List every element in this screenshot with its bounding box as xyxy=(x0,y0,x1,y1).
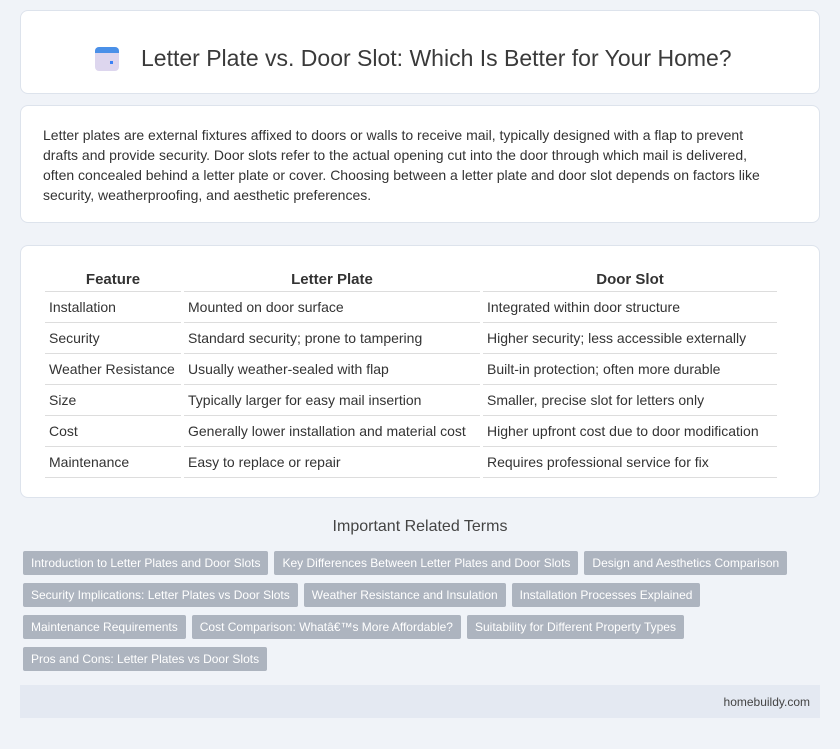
footer xyxy=(20,685,820,718)
tags xyxy=(23,551,787,671)
panel: comparison table: Size xyxy=(49,392,76,408)
panel: comparison table: Built-in protection; often more durable xyxy=(487,361,720,377)
intro text xyxy=(20,105,820,223)
tags: Cost Comparison: Whatâ€™s More Affordable? xyxy=(200,620,453,634)
panel: comparison table: Integrated within door structure xyxy=(487,299,680,315)
panel: comparison table: Installation xyxy=(49,299,116,315)
panel: comparison table: Maintenance xyxy=(49,454,129,470)
panel: comparison table: Feature xyxy=(86,270,140,288)
panel: comparison table: Weather Resistance xyxy=(49,361,175,377)
panel: comparison table: Cost xyxy=(49,423,78,439)
header card xyxy=(20,10,820,94)
panel: comparison table: Generally lower installation and material cost xyxy=(188,423,466,439)
panel: comparison table: Higher security; less accessible externally xyxy=(487,330,746,346)
intro text: Letter plates are external fixtures affixed to doors or walls to receive mail, typically designed with a flap to prevent drafts and provide security. Door slots refer to the actual opening cut into the door through which mail is delivered, often concealed behind a letter plate or cover. Choosing between a letter plate and door slot depends on factors like security, weatherproofing, and aesthetic preferences. xyxy=(43,127,760,203)
tags: Security Implications: Letter Plates vs Door Slots xyxy=(31,588,290,602)
panel: comparison table xyxy=(20,245,820,498)
icon: calendar xyxy=(95,47,119,71)
panel: comparison table: Usually weather-sealed with flap xyxy=(188,361,389,377)
panel: comparison table: Standard security; prone to tampering xyxy=(188,330,422,346)
tags: Design and Aesthetics Comparison xyxy=(592,556,779,570)
panel: comparison table: Mounted on door surface xyxy=(188,299,344,315)
title: Letter Plate vs. Door Slot: Which Is Better for Your Home? xyxy=(141,45,732,71)
tags: Pros and Cons: Letter Plates vs Door Slots xyxy=(31,652,259,666)
panel: comparison table: Letter Plate xyxy=(291,270,373,288)
panel: comparison table: Easy to replace or repair xyxy=(188,454,341,470)
panel: comparison table: Typically larger for easy mail insertion xyxy=(188,392,421,408)
tags: Suitability for Different Property Types xyxy=(475,620,676,634)
panel: comparison table: Requires professional service for fix xyxy=(487,454,709,470)
tags: Weather Resistance and Insulation xyxy=(312,588,498,602)
panel: comparison table: Security xyxy=(49,330,100,346)
panel: comparison table: Door Slot xyxy=(596,270,664,288)
footer: homebuildy.com xyxy=(724,695,810,709)
tags: Maintenance Requirements xyxy=(31,620,178,634)
tags: Installation Processes Explained xyxy=(520,588,692,602)
panel: comparison table: Smaller, precise slot for letters only xyxy=(487,392,704,408)
panel: comparison table: Higher upfront cost due to door modification xyxy=(487,423,759,439)
related terms heading: Important Related Terms xyxy=(333,518,507,535)
tags: Introduction to Letter Plates and Door Slots xyxy=(31,556,260,570)
tags: Key Differences Between Letter Plates and Door Slots xyxy=(282,556,570,570)
